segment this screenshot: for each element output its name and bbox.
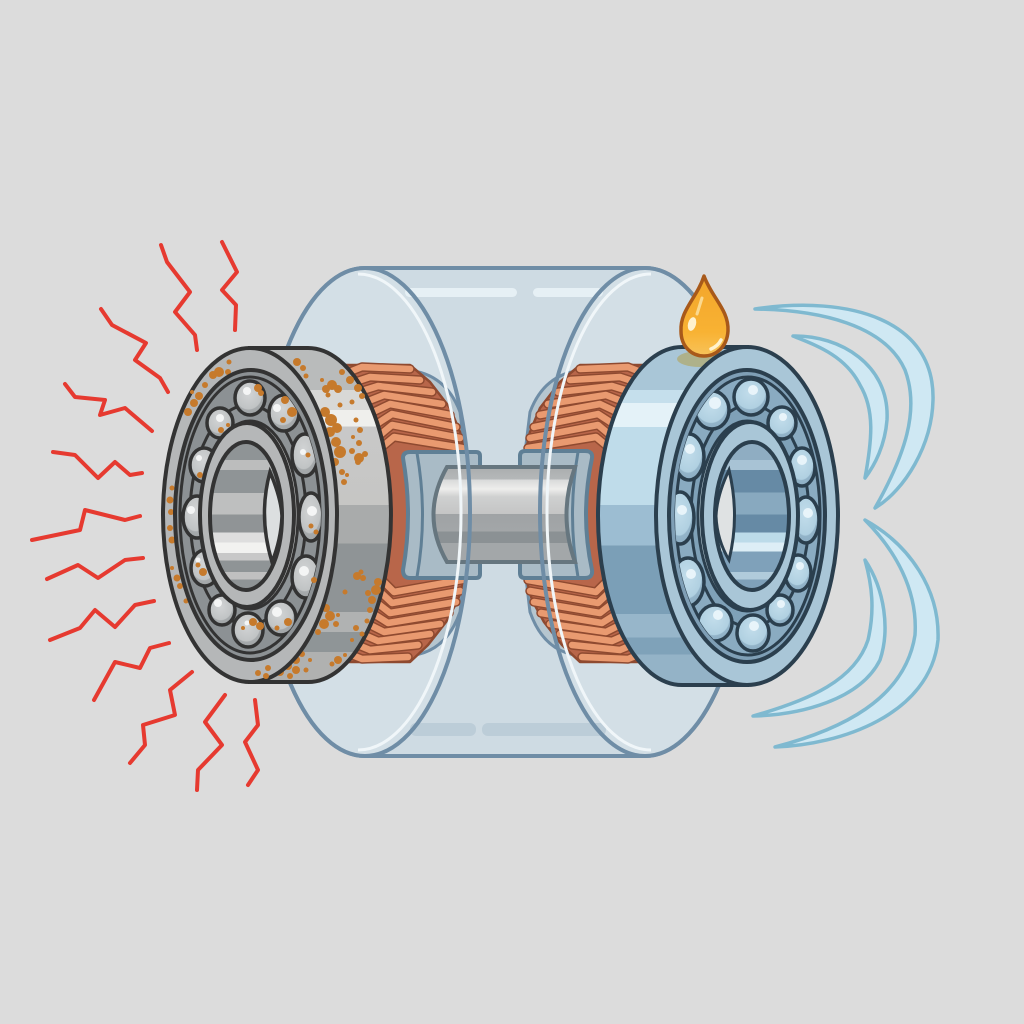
healthy lubricated bearing — [598, 347, 838, 685]
inner race shoulder — [202, 421, 298, 609]
see-through gap — [716, 470, 734, 560]
worn rusty bearing — [163, 348, 391, 682]
inner race — [200, 423, 294, 607]
inner race — [702, 422, 798, 610]
ball raceway — [669, 370, 825, 662]
rust on outer race face — [166, 360, 271, 679]
blue smooth-running swooshes — [753, 305, 938, 747]
copper winding: left — [340, 365, 472, 662]
outer race face — [163, 348, 337, 682]
red vibration and heat zigzags — [32, 242, 258, 790]
icon: oil drop — [681, 276, 728, 356]
balls — [183, 381, 323, 647]
illustration: worn vs lubricated bearings on a motor shaft — [30, 240, 940, 792]
inner race shoulder — [698, 421, 796, 611]
rust on side band — [276, 358, 382, 679]
balls — [666, 379, 819, 651]
bore — [715, 442, 789, 590]
glass cylinder body — [260, 268, 750, 756]
outer race side band — [250, 348, 391, 682]
outer race face — [656, 347, 838, 685]
outer race side band — [598, 347, 747, 685]
oil shadow — [677, 351, 723, 367]
ball highlights — [677, 385, 813, 631]
copper winding: right — [518, 365, 650, 662]
glass cylinder front rims — [260, 268, 750, 756]
ball highlights and rust — [187, 384, 318, 630]
bore — [210, 442, 282, 590]
ball raceway — [175, 370, 327, 660]
shaft and housings — [403, 451, 592, 578]
see-through gap — [264, 472, 282, 562]
